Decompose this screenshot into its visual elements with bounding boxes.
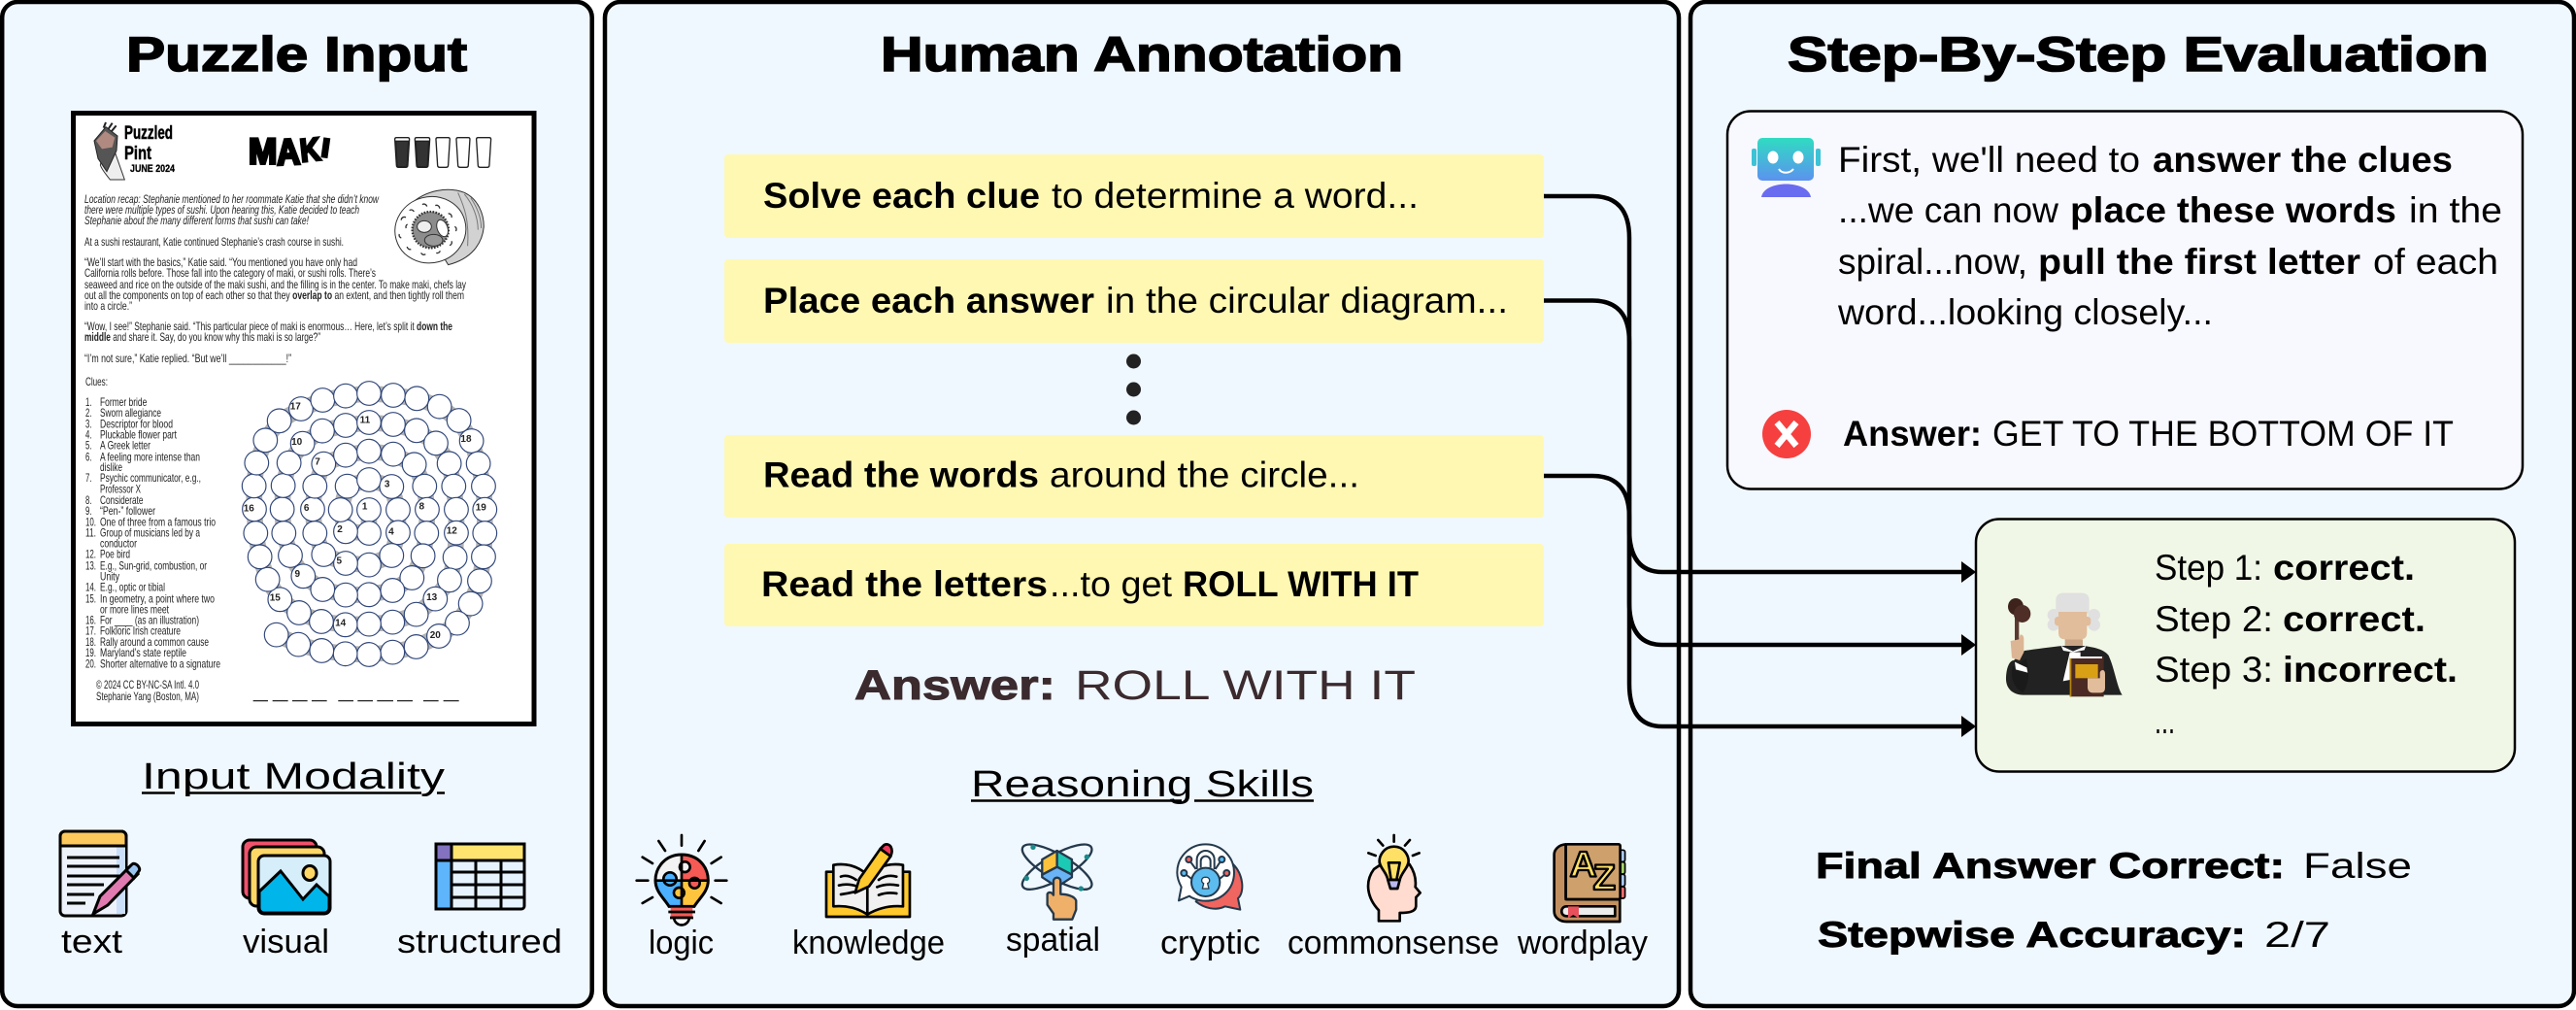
- model reasoning text: word...looking closely...: [1837, 292, 2213, 332]
- step verdicts: Step 3:: [2155, 650, 2273, 690]
- step box 2: Place each answer: [763, 281, 1094, 320]
- puzzle title: maki: I: [319, 133, 331, 163]
- model reasoning text: spiral...now,: [1838, 242, 2027, 282]
- spiral diagram: 18: [460, 434, 472, 445]
- story text: there were multiple types of sushi. Upon hearing this, Katie decided to teach: [84, 203, 359, 217]
- arrow: step 3 to verdict: [1544, 476, 1976, 737]
- icon: knowledge: [826, 844, 910, 917]
- clue list: Professor X: [100, 482, 141, 495]
- story text: At a sushi restaurant, Katie continued Stephanie’s crash course in sushi.: [84, 235, 344, 249]
- clue list: A Greek letter: [100, 439, 151, 453]
- label: cryptic: cryptic: [1160, 925, 1260, 961]
- step box 1: to determine a word...: [1052, 176, 1419, 216]
- clue list: or more lines meet: [100, 602, 169, 616]
- clue list: 9.: [85, 504, 91, 518]
- icon: wordplay: [1555, 844, 1625, 922]
- step box 3: around the circle...: [1050, 454, 1359, 495]
- puzzle page image: [74, 113, 534, 724]
- icon: commonsense: [1368, 835, 1421, 921]
- puzzled pint logo: Pint: [124, 144, 152, 164]
- clue list: Group of musicians led by a: [100, 525, 200, 539]
- spiral diagram: 13: [426, 592, 438, 603]
- ground truth answer: ROLL WITH IT: [1075, 662, 1416, 709]
- clue list: 1.: [85, 395, 91, 409]
- label: spatial: spatial: [1006, 922, 1100, 959]
- clue list: Maryland’s state reptile: [100, 646, 186, 659]
- puzzle title: maki: A: [276, 131, 301, 173]
- step box 2: [724, 259, 1544, 343]
- icon: spatial: [1017, 836, 1097, 920]
- clue list: 13.: [85, 558, 96, 572]
- model answer: Answer:: [1843, 414, 1982, 454]
- clue list: 17.: [85, 624, 96, 638]
- spiral diagram: 17: [290, 402, 301, 413]
- metric: stepwise accuracy: 2/7: [2264, 915, 2330, 955]
- story text: middle and share it. Say, do you know why this maki is so large?”: [84, 330, 320, 344]
- puzzled pint logo: JUNE 2024: [130, 163, 176, 175]
- icon: wordplay: Z: [1593, 857, 1616, 897]
- panel: puzzle input: [2, 2, 592, 1006]
- clue list: 7.: [85, 471, 91, 485]
- step box 4: Read the letters: [761, 564, 1048, 604]
- clue list: 10.: [85, 515, 96, 528]
- spiral diagram: 2: [337, 524, 343, 535]
- clue list: 12.: [85, 548, 96, 561]
- clue list: Former bride: [100, 395, 148, 409]
- model reasoning text: pull the first letter: [2038, 242, 2360, 282]
- arrow: step 2 to verdict: [1544, 301, 1976, 656]
- label: wordplay: wordplay: [1517, 925, 1648, 961]
- icon: logic: [637, 835, 726, 925]
- story text: Clues:: [85, 375, 108, 388]
- clue list: 3.: [85, 417, 91, 430]
- clue list: 2.: [85, 406, 91, 420]
- icon: robot: [1752, 138, 1821, 197]
- metric: stepwise accuracy: Stepwise Accuracy:: [1818, 915, 2246, 955]
- spiral diagram: 16: [244, 504, 254, 515]
- spiral diagram: 20: [430, 630, 441, 641]
- step box 3: Read the words: [763, 454, 1039, 495]
- spiral diagram: 3: [385, 480, 390, 490]
- puzzled pint logo: [94, 122, 176, 180]
- label: logic: logic: [649, 925, 714, 961]
- clue list: [85, 395, 220, 703]
- clue list: Unity: [100, 569, 119, 583]
- vertical ellipsis dots: [1126, 354, 1141, 425]
- spiral diagram: 12: [447, 526, 457, 537]
- spiral diagram: 19: [476, 502, 486, 513]
- clue list: Descriptor for blood: [100, 417, 173, 430]
- step verdicts: Step 1:: [2155, 548, 2262, 588]
- beer glass rating: [395, 138, 491, 167]
- clue list: conductor: [100, 537, 137, 551]
- clue list: 16.: [85, 614, 96, 627]
- panel: human annotation: [605, 2, 1679, 1006]
- model reasoning text: place these words: [2070, 190, 2396, 230]
- story text: seaweed and rice on the outside of the maki sushi, and the filling is in the center. To make maki, chefs lay: [84, 278, 466, 291]
- step box 4: ROLL WITH IT: [1183, 564, 1419, 604]
- clue list: 8.: [85, 493, 91, 507]
- model reasoning text: in the: [2409, 190, 2502, 230]
- metric: stepwise accuracy: [1818, 915, 2330, 955]
- puzzle title: maki: K: [298, 132, 322, 170]
- model answer: GET TO THE BOTTOM OF IT: [1992, 414, 2454, 454]
- clue list: Pluckable flower part: [100, 427, 177, 441]
- puzzled pint logo: Puzzled: [124, 123, 173, 144]
- model reasoning text: [1837, 140, 2502, 332]
- ground truth answer: Answer:: [854, 662, 1055, 709]
- step verdicts: correct.: [2273, 548, 2415, 588]
- icon: wrong answer cross: [1762, 410, 1811, 458]
- step verdicts: [2155, 548, 2458, 741]
- label: text: text: [61, 924, 123, 960]
- model reasoning text: First, we'll need to: [1838, 140, 2140, 180]
- icon: cryptic: [1177, 844, 1242, 910]
- step verdicts: incorrect.: [2283, 650, 2458, 690]
- step box 1: [724, 154, 1544, 238]
- clue list: Considerate: [100, 493, 144, 507]
- icon: judge: [2006, 593, 2123, 696]
- clue list: “Pen-” follower: [100, 504, 155, 518]
- clue list: Sworn allegiance: [100, 406, 161, 420]
- step box 4: [724, 544, 1544, 626]
- ground truth answer: [854, 662, 1416, 709]
- clue list: 20.: [85, 656, 96, 670]
- step verdicts: ...: [2155, 701, 2175, 741]
- clue list: 4.: [85, 427, 91, 441]
- spiral diagram: 14: [335, 619, 347, 629]
- clue list: E.g., Sun-grid, combustion, or: [100, 558, 207, 572]
- panel: step-by-step evaluation: [1690, 2, 2574, 1006]
- clue list: Folkloric Irish creature: [100, 624, 181, 638]
- heading: reasoning skills: Reasoning Skills: [971, 764, 1314, 805]
- clue list: © 2024 CC BY-NC-SA Intl. 4.0: [96, 678, 199, 691]
- clue list: E.g., optic or tibial: [100, 581, 165, 594]
- label: structured: structured: [397, 924, 562, 960]
- heading: input modality: Input Modality: [142, 757, 445, 797]
- metric: final answer correct: [1816, 846, 2412, 886]
- clue list: 15.: [85, 591, 96, 605]
- icon: wordplay: A: [1570, 844, 1597, 885]
- model response box: [1727, 111, 2523, 489]
- clue list: 14.: [85, 581, 96, 594]
- story text: Stephanie about the many different forms that sushi can take!: [84, 214, 309, 227]
- step verdicts: correct.: [2283, 599, 2425, 639]
- icon: structured modality: [436, 844, 524, 909]
- clue list: 11.: [85, 525, 96, 539]
- clue list: One of three from a famous trio: [100, 515, 216, 528]
- spiral diagram: 1: [362, 501, 368, 512]
- clue list: A feeling more intense than: [100, 450, 200, 463]
- spiral diagram: [242, 382, 497, 701]
- clue list: 6.: [85, 450, 91, 463]
- story text: “Wow, I see!” Stephanie said. “This particular piece of maki is enormous… Here, let’s split it down the: [84, 320, 452, 333]
- clue list: 18.: [85, 635, 96, 649]
- story text: California rolls before. Those fall into the category of maki, or sushi rolls. There’s: [84, 266, 376, 280]
- icon: visual modality: [243, 840, 330, 914]
- story text: “We’ll start with the basics,” Katie said. “You mentioned you have only had: [84, 255, 357, 269]
- label: commonsense: commonsense: [1288, 925, 1499, 961]
- puzzle title: maki: M: [249, 130, 277, 171]
- spiral diagram: 10: [291, 437, 303, 448]
- spiral diagram: 9: [295, 569, 301, 580]
- model reasoning text: answer the clues: [2153, 140, 2453, 180]
- spiral diagram: 8: [419, 501, 425, 512]
- clue list: Rally around a common cause: [100, 635, 209, 649]
- step box 1: Solve each clue: [763, 176, 1040, 216]
- heading: puzzle input: Puzzle Input: [126, 27, 467, 82]
- story text: into a circle.”: [84, 299, 132, 313]
- spiral diagram: 15: [270, 592, 281, 603]
- spiral diagram: 11: [360, 416, 371, 426]
- spiral diagram: 4: [388, 526, 394, 537]
- spiral diagram: 5: [337, 556, 343, 566]
- label: knowledge: knowledge: [792, 925, 945, 961]
- judge verdict box: [1976, 519, 2515, 771]
- metric: final answer correct: False: [2303, 846, 2412, 886]
- story text: out all the components on top of each other so that they overlap to an extent, and then tightly roll them: [84, 288, 464, 302]
- model reasoning text: ...we can now: [1838, 190, 2058, 230]
- step box 3: [724, 435, 1544, 518]
- clue list: dislike: [100, 460, 122, 474]
- clue list: In geometry, a point where two: [100, 591, 215, 605]
- story text: [84, 192, 466, 388]
- step verdicts: Step 2:: [2155, 599, 2273, 639]
- story text: Location recap: Stephanie mentioned to her roommate Katie that she didn’t know: [84, 192, 380, 206]
- step box 4: ...to get: [1050, 564, 1173, 604]
- clue list: Psychic communicator, e.g.,: [100, 471, 201, 485]
- clue list: Shorter alternative to a signature: [100, 656, 220, 670]
- step box 2: in the circular diagram...: [1106, 281, 1508, 320]
- model reasoning text: of each: [2373, 242, 2498, 282]
- clue list: 19.: [85, 646, 96, 659]
- puzzle title: maki: [249, 130, 331, 173]
- story text: “I’m not sure,” Katie replied. “But we’ll ____________!”: [84, 352, 291, 365]
- label: visual: visual: [243, 924, 329, 960]
- clue list: Poe bird: [100, 548, 130, 561]
- icon: text modality: [60, 831, 140, 916]
- clue list: For ____ (as an illustration): [100, 614, 199, 627]
- spiral diagram: 7: [315, 457, 320, 468]
- heading: human annotation: Human Annotation: [881, 27, 1403, 82]
- heading: step-by-step evaluation: Step-By-Step Evaluation: [1788, 27, 2489, 82]
- sushi illustration: [387, 188, 484, 271]
- arrow: step 1 to verdict: [1544, 196, 1976, 583]
- metric: final answer correct: Final Answer Correct:: [1816, 846, 2285, 886]
- clue list: 5.: [85, 439, 91, 453]
- clue list: Stephanie Yang (Boston, MA): [96, 690, 199, 703]
- spiral diagram: 6: [304, 503, 310, 514]
